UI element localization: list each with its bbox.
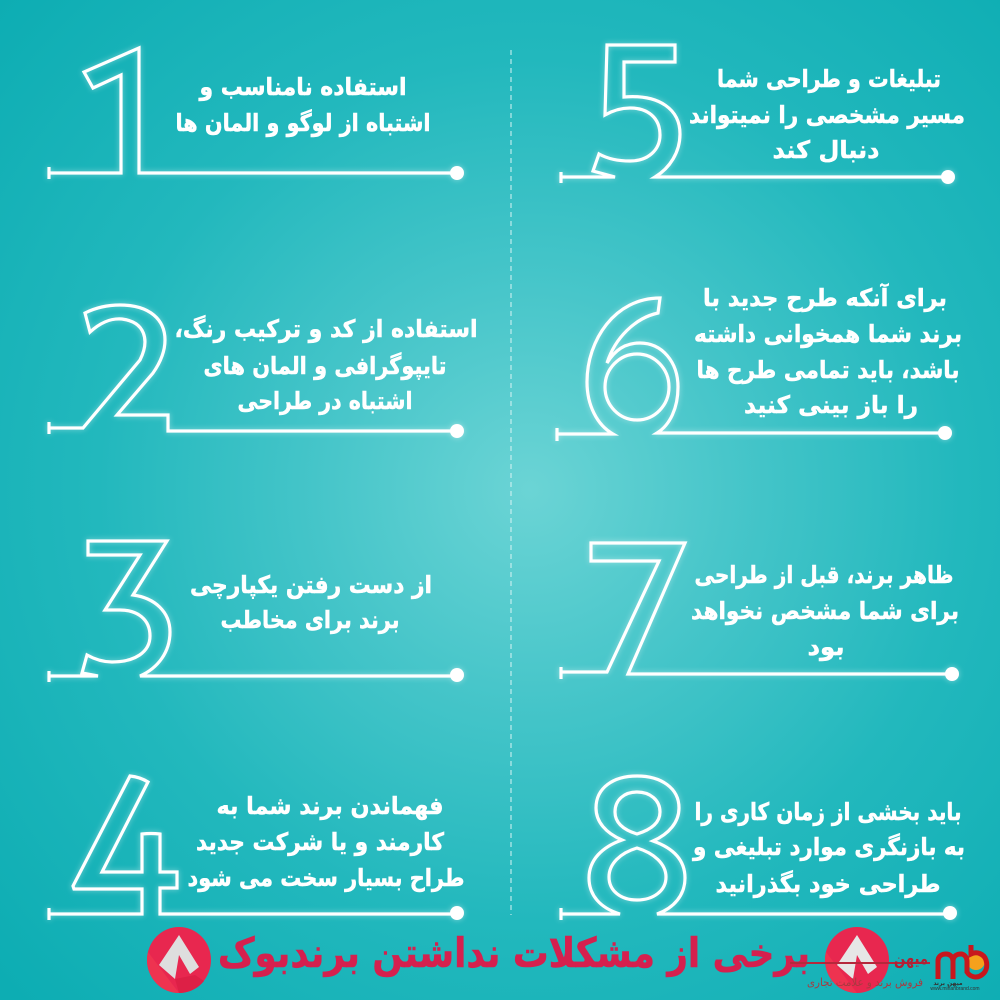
text: item 8: به بازنگری موارد تبلیغی و xyxy=(692,833,965,861)
text: item 1: استفاده نامناسب و xyxy=(199,73,406,101)
text: item 4: طراح بسیار سخت می شود xyxy=(188,864,464,892)
panel: item 6 xyxy=(557,283,962,441)
panel: item 7 xyxy=(561,543,959,681)
text: item 6: برند شما همخوانی داشته xyxy=(694,320,962,348)
numeral 3 with baseline xyxy=(49,541,464,682)
panel: item 3 xyxy=(49,541,464,682)
text: item 6: را باز بینی کنید xyxy=(744,391,918,419)
logo: mb: www.mihanbrand.com xyxy=(930,986,980,992)
panel: item 5 xyxy=(561,45,965,184)
text: item 4: کارمند و یا شرکت جدید xyxy=(196,828,444,856)
watermark: brand name: میهن xyxy=(894,949,928,969)
text: item 5: مسیر مشخصی را نمیتواند xyxy=(689,101,965,129)
numeral 1 with baseline xyxy=(49,48,464,180)
text: item 7: برای شما مشخص نخواهد xyxy=(691,597,959,625)
text: item 5 xyxy=(689,65,965,164)
numeral 7 with baseline xyxy=(561,543,959,681)
text: item 3 xyxy=(190,571,432,634)
text: item 3: از دست رفتن یکپارچی xyxy=(190,571,432,599)
watermark: brand name xyxy=(790,949,930,989)
icon: right arrow badge xyxy=(825,927,889,993)
logo: mb: میهن برند xyxy=(933,980,963,987)
title: برخی از مشکلات نداشتن برندبوک xyxy=(218,929,810,977)
text: item 7: ظاهر برند، قبل از طراحی xyxy=(694,561,954,589)
text: item 5: تبلیغات و طراحی شما xyxy=(717,65,941,93)
numeral 4 with baseline xyxy=(49,776,464,920)
text: item 8: طراحی خود بگذرانید xyxy=(716,870,940,898)
text: item 8 xyxy=(692,798,965,898)
panel: item 2 xyxy=(49,305,478,438)
text: item 1: اشتباه از لوگو و المان ها xyxy=(176,109,430,137)
text: item 4: فهماندن برند شما به xyxy=(216,792,444,820)
text: item 2: اشتباه در طراحی xyxy=(238,387,412,415)
panel: item 4 xyxy=(49,776,464,920)
text: item 2: استفاده از کد و ترکیب رنگ، xyxy=(174,315,478,343)
text: item 7 xyxy=(691,561,959,661)
text: item 2: تایپوگرافی و المان های xyxy=(204,352,446,380)
text: item 6 xyxy=(694,283,962,419)
numeral 2 with baseline xyxy=(49,305,464,438)
text: item 3: برند برای مخاطب xyxy=(220,606,400,634)
icon: left arrow badge xyxy=(147,927,211,993)
numeral 8 with baseline xyxy=(561,776,957,920)
logo: mb xyxy=(930,945,987,992)
panel: item 8 xyxy=(561,776,965,920)
numeral 5 with baseline xyxy=(561,45,955,184)
text: item 6: برای آنکه طرح جدید با xyxy=(703,283,947,312)
text: item 6: باشد، باید تمامی طرح ها xyxy=(696,356,960,384)
text: item 1 xyxy=(176,73,430,137)
watermark: brand name: فروش برند و علامت تجاری xyxy=(807,976,923,989)
text: item 5: دنبال کند xyxy=(772,136,880,164)
text: item 4 xyxy=(188,792,464,892)
text: item 7: بود xyxy=(808,633,844,661)
panel: item 1 xyxy=(49,48,464,180)
text: item 2 xyxy=(174,315,478,415)
numeral 6 with baseline xyxy=(557,298,952,441)
